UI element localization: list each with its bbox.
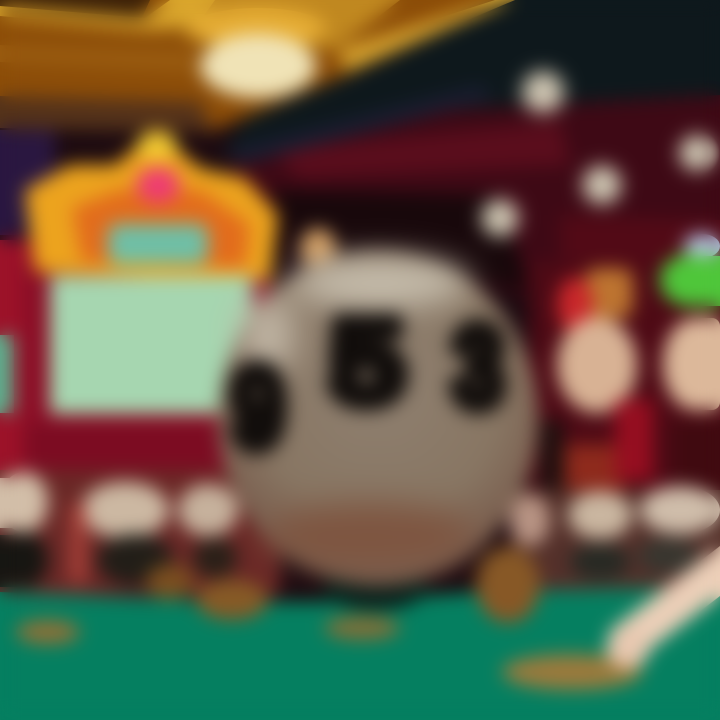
crown <box>25 130 278 280</box>
crown gem <box>136 167 180 203</box>
maroon back wall <box>225 85 720 300</box>
ball numbers <box>232 296 504 471</box>
right chips <box>510 486 720 590</box>
ball body <box>218 250 538 586</box>
ball shadow <box>323 566 427 610</box>
sign board with crown <box>22 130 278 480</box>
ball numbers: 9 <box>232 346 284 471</box>
board screen <box>50 276 252 414</box>
ceiling spot lights <box>476 65 720 242</box>
right slot machines <box>530 234 720 490</box>
cream stick <box>606 546 720 668</box>
ceiling: dark right side <box>220 0 720 155</box>
lottery ball <box>218 228 538 610</box>
machine one <box>540 268 653 490</box>
coins <box>16 547 642 690</box>
crown inner <box>72 190 250 268</box>
ball numbers: 5 <box>330 296 404 427</box>
left edge machine <box>0 130 55 475</box>
teal panel <box>108 224 208 264</box>
machine two <box>660 234 720 490</box>
crown top jewel <box>137 131 177 161</box>
left chips <box>0 470 280 595</box>
ball numbers: 3 <box>452 303 504 429</box>
ball highlights <box>240 259 475 567</box>
sign frame <box>22 255 270 480</box>
ceiling: brown left side with gold frame <box>0 0 515 132</box>
poker chip rows <box>0 470 720 595</box>
ball nub <box>300 228 336 268</box>
green felt table <box>0 586 720 720</box>
chandelier light <box>190 8 326 98</box>
